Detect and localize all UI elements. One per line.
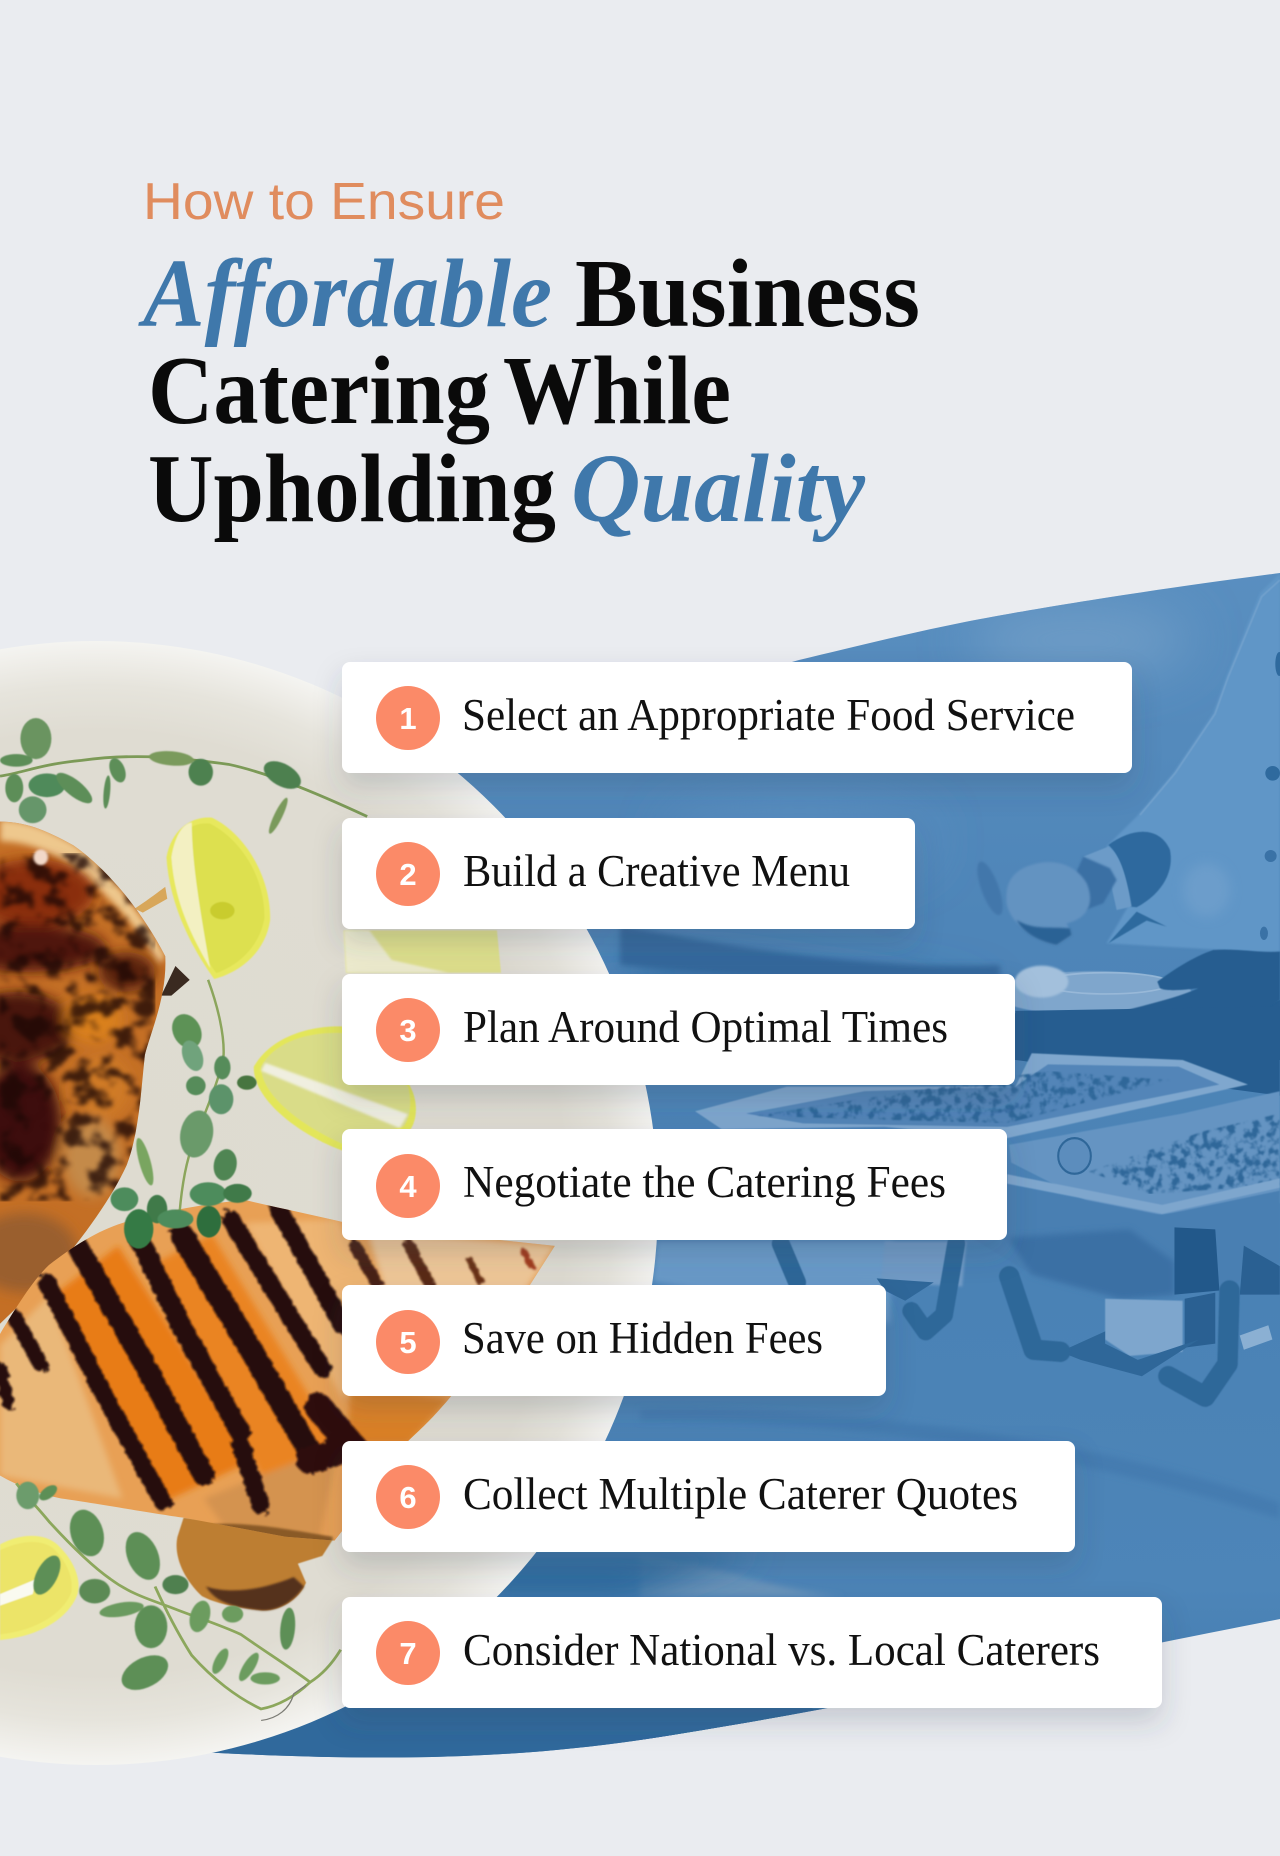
card 3: optimal times: 3: [399, 1013, 417, 1048]
card 5: hidden fees: 5: [399, 1325, 417, 1360]
hand with food: [1006, 862, 1091, 928]
dark counter below plate: [1013, 1000, 1280, 1060]
lemon wedges upper group: [166, 818, 501, 1151]
pale floor behind legs: [652, 1242, 893, 1323]
chafing trays: [695, 1006, 1280, 1218]
card 3: optimal times: Plan Around Optimal Times: [463, 1002, 948, 1052]
grilled chicken breast lower: [0, 1200, 555, 1610]
chef jacket: [972, 573, 1280, 1060]
sleeve: [1108, 832, 1171, 907]
tray body: [1085, 1190, 1280, 1219]
chafing stand and legs: [640, 1174, 1280, 1743]
gloved hand: [1128, 949, 1280, 1009]
food on plate: [0, 718, 555, 1720]
herb sprig top: [0, 718, 367, 835]
main heading: While: [503, 337, 731, 445]
card 4: negotiate fees: 4: [399, 1169, 417, 1204]
jacket buttons: [1275, 652, 1280, 676]
main heading: Quality: [571, 435, 865, 543]
card 7: national vs local: Consider National vs. Local Caterers: [463, 1625, 1100, 1675]
card 3: optimal times: [342, 974, 1015, 1085]
grill marks: [0, 1208, 531, 1506]
card 1: select food service: Select an Appropriate Food Service: [462, 690, 1075, 740]
plate: [0, 641, 658, 1765]
card 4: negotiate fees: [342, 1129, 1007, 1240]
card 6: caterer quotes: [342, 1441, 1075, 1552]
herb sprig bottom: [16, 1482, 341, 1720]
main heading: Catering: [148, 337, 490, 445]
lemon wedge 3: [254, 1026, 416, 1151]
main heading: [137, 240, 920, 543]
tray rim: [1007, 1174, 1280, 1214]
lemon wedge 2 (pale, behind cards): [344, 930, 501, 973]
plate: [1015, 970, 1192, 1010]
soft light in upper area: [640, 605, 1190, 1010]
card 2: creative menu: 2: [399, 857, 417, 892]
herb sprig middle: [111, 980, 257, 1249]
card 6: caterer quotes: Collect Multiple Caterer Quotes: [463, 1469, 1018, 1519]
main heading: Affordable: [137, 240, 552, 348]
grilled chicken breast upper: [0, 820, 190, 1324]
dark counter streak: [618, 929, 1002, 974]
card 7: national vs local: 7: [399, 1636, 417, 1671]
card 1: select food service: [342, 662, 1132, 773]
lemon wedge lower left: [0, 1536, 79, 1640]
card 2: creative menu: [342, 818, 915, 929]
card 5: hidden fees: Save on Hidden Fees: [462, 1313, 823, 1363]
floor streaks: [692, 1413, 1276, 1514]
main heading: Upholding: [148, 435, 556, 543]
spatula: [978, 862, 1002, 914]
main heading: Business: [575, 240, 920, 348]
dark lower edge: [212, 1706, 812, 1758]
card 1: select food service: 1: [399, 701, 417, 736]
card 7: national vs local: [342, 1597, 1162, 1708]
card 5: hidden fees: [342, 1285, 886, 1396]
dark gap beside plate: [497, 1552, 730, 1597]
collar wedge: [1108, 912, 1167, 943]
chicken knuckle: [177, 1518, 335, 1610]
lemon wedge 1: [166, 818, 270, 979]
blue kitchen photo panel: [200, 560, 1280, 1770]
intro line: How to Ensure: [143, 173, 505, 231]
card 2: creative menu: Build a Creative Menu: [463, 846, 850, 896]
card 4: negotiate fees: Negotiate the Catering Fees: [463, 1157, 946, 1207]
card 6: caterer quotes: 6: [399, 1480, 417, 1515]
